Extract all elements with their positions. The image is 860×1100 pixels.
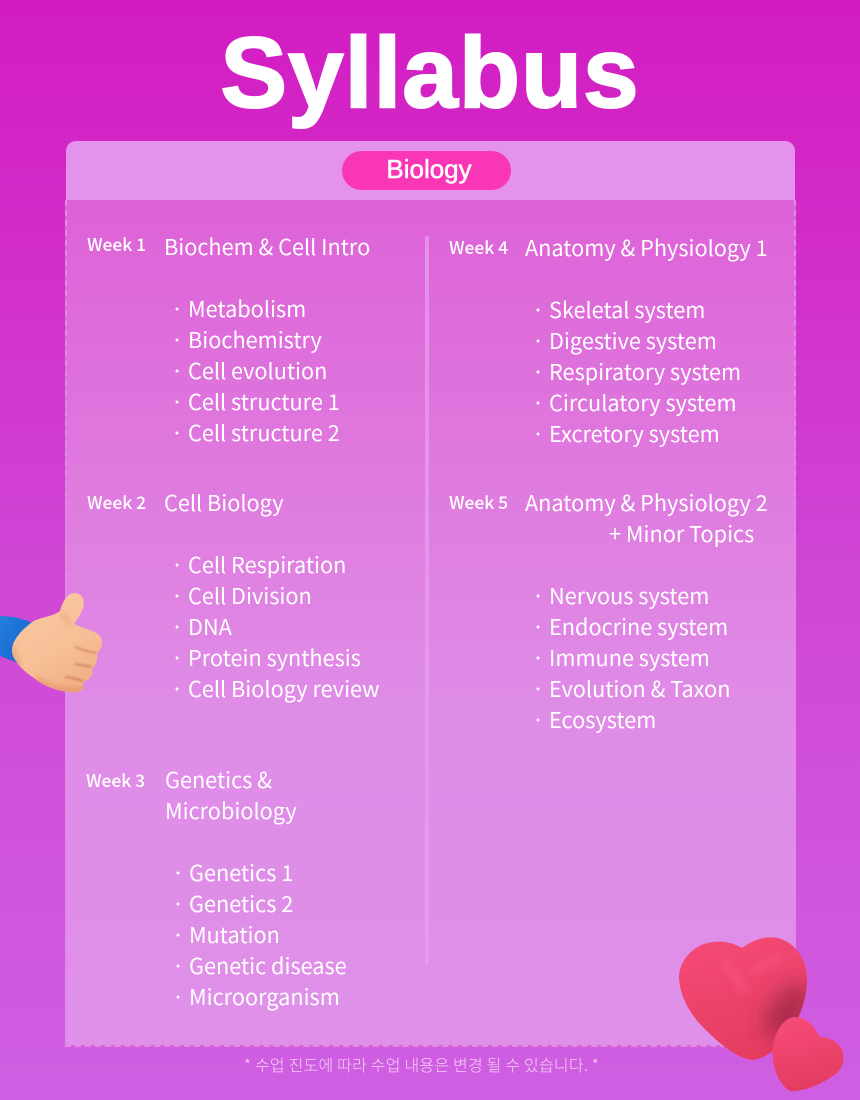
week 1 block: · Metabolism: [171, 293, 306, 324]
week 1 block: Biochem & Cell Intro: [164, 231, 370, 262]
week 1 block: Week 1: [87, 232, 146, 257]
week 4 block: · Circulatory system: [532, 387, 737, 418]
week 5 block: · Evolution & Taxon: [532, 673, 730, 704]
week 3 block: Genetics &: [165, 764, 272, 795]
week 5 block: · Immune system: [532, 642, 710, 673]
week 5 block: + Minor Topics: [609, 518, 754, 549]
week 3 block: · Microorganism: [172, 981, 340, 1012]
week 2 block: Week 2: [87, 490, 146, 515]
week 2 block: · Cell Biology review: [171, 673, 380, 704]
week 5 block: · Endocrine system: [532, 611, 728, 642]
week 2 block: · DNA: [171, 611, 232, 642]
week 5 block: Week 5: [449, 490, 508, 515]
week 4 block: Anatomy & Physiology 1: [525, 232, 768, 263]
week 2 block: · Cell Division: [171, 580, 312, 611]
week 4 block: · Digestive system: [532, 325, 717, 356]
week 3 block: · Mutation: [172, 919, 280, 950]
week 2 block: · Protein synthesis: [171, 642, 361, 673]
week 5 block: Anatomy & Physiology 2: [525, 487, 768, 518]
week 5 block: · Nervous system: [532, 580, 709, 611]
week 4 block: · Excretory system: [532, 418, 720, 449]
column divider: [425, 236, 429, 965]
week 1 block: · Cell structure 1: [171, 386, 340, 417]
week 3 block: Microbiology: [165, 795, 297, 826]
icon: hearts: [679, 937, 844, 1092]
week 3 block: · Genetics 2: [172, 888, 293, 919]
week 4 block: · Respiratory system: [532, 356, 741, 387]
subject pill: Biology: Biology: [386, 154, 472, 184]
footnote: * 수업 진도에 따라 수업 내용은 변경 될 수 있습니다. *: [244, 1052, 599, 1076]
week 1 block: · Biochemistry: [171, 324, 322, 355]
week 2 block: Cell Biology: [164, 487, 284, 518]
week 5 block: · Ecosystem: [532, 704, 656, 735]
week 1 block: · Cell structure 2: [171, 417, 340, 448]
week 3 block: · Genetic disease: [172, 950, 347, 981]
subject pill: Biology: [342, 151, 511, 190]
title: Syllabus: [220, 17, 640, 129]
week 3 block: · Genetics 1: [172, 857, 293, 888]
panel header band: [66, 141, 795, 200]
week 2 block: · Cell Respiration: [171, 549, 346, 580]
week 3 block: Week 3: [86, 768, 145, 793]
icon: thumbs up hand: [0, 593, 102, 692]
week 4 block: Week 4: [449, 235, 508, 260]
week 1 block: · Cell evolution: [171, 355, 327, 386]
panel: syllabus card: [65, 200, 796, 1047]
week 4 block: · Skeletal system: [532, 294, 705, 325]
